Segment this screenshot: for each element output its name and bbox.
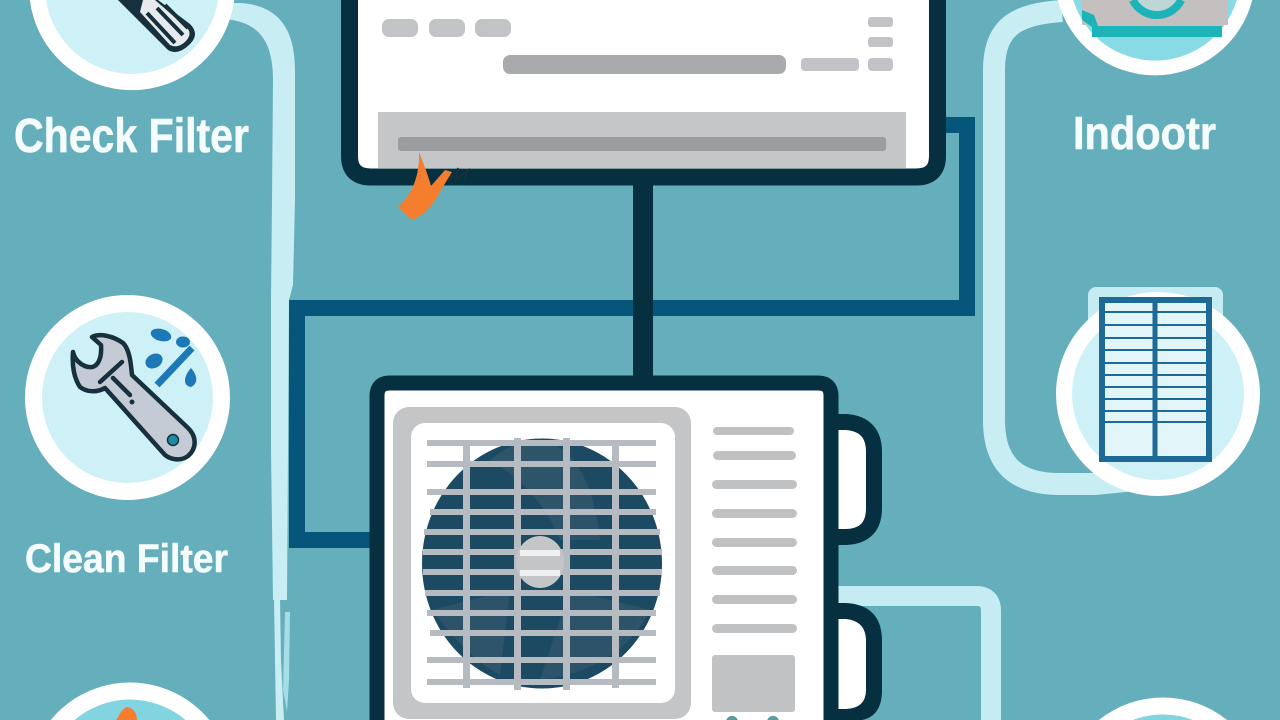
panel: bottom right step (1099, 697, 1227, 720)
light pipe: right, from indoor icon to filter circle (994, 11, 1135, 484)
upper side handle (838, 422, 874, 537)
fan disc (422, 438, 662, 688)
label: clean filter: Clean Filter (25, 537, 228, 581)
light pipe: left, from check filter circle down (225, 3, 295, 720)
vent lines (712, 427, 797, 633)
panel: bottom left step (51, 683, 209, 720)
filter backing card (1088, 287, 1223, 387)
circle: bottom left (51, 683, 209, 720)
control panel dots (726, 716, 779, 720)
icon: wrench (73, 335, 195, 459)
indoor unit (350, 0, 938, 177)
circle: check filter (30, 0, 234, 90)
fan grille (423, 438, 662, 690)
icon: orange flame (116, 707, 137, 720)
control panel (712, 655, 795, 712)
refrigerant pipe: dark blue loop (297, 125, 967, 540)
fan hub (516, 536, 564, 588)
circle: indoor (1058, 0, 1252, 75)
fan blades shading (432, 440, 650, 680)
circle: filter (1064, 300, 1252, 488)
panel: filter step (1064, 287, 1252, 488)
display bar (503, 55, 786, 74)
light pipe: outdoor unit to bottom right (838, 596, 991, 720)
indoor unit body (350, 0, 938, 177)
icon: filter grid (1102, 300, 1209, 459)
outdoor unit (377, 383, 882, 720)
icon: filter brush (118, 0, 195, 52)
icon: water splash (143, 326, 196, 387)
fan housing (393, 407, 691, 719)
icon: indoor filter unit (1082, 0, 1228, 37)
panel: indoor step (1058, 0, 1252, 159)
connecting stem between units (633, 180, 653, 380)
icon: orange leak flame at indoor unit (398, 152, 468, 220)
label: indoor: Indootr (1073, 107, 1216, 159)
lower side handle (838, 603, 882, 720)
label: check filter: Check Filter (14, 110, 249, 163)
panel: clean filter step (25, 304, 228, 581)
air vent (378, 112, 906, 168)
status buttons (382, 17, 893, 71)
panel: check filter step (14, 0, 249, 163)
outdoor unit body (377, 383, 831, 720)
circle: clean filter (34, 304, 222, 492)
